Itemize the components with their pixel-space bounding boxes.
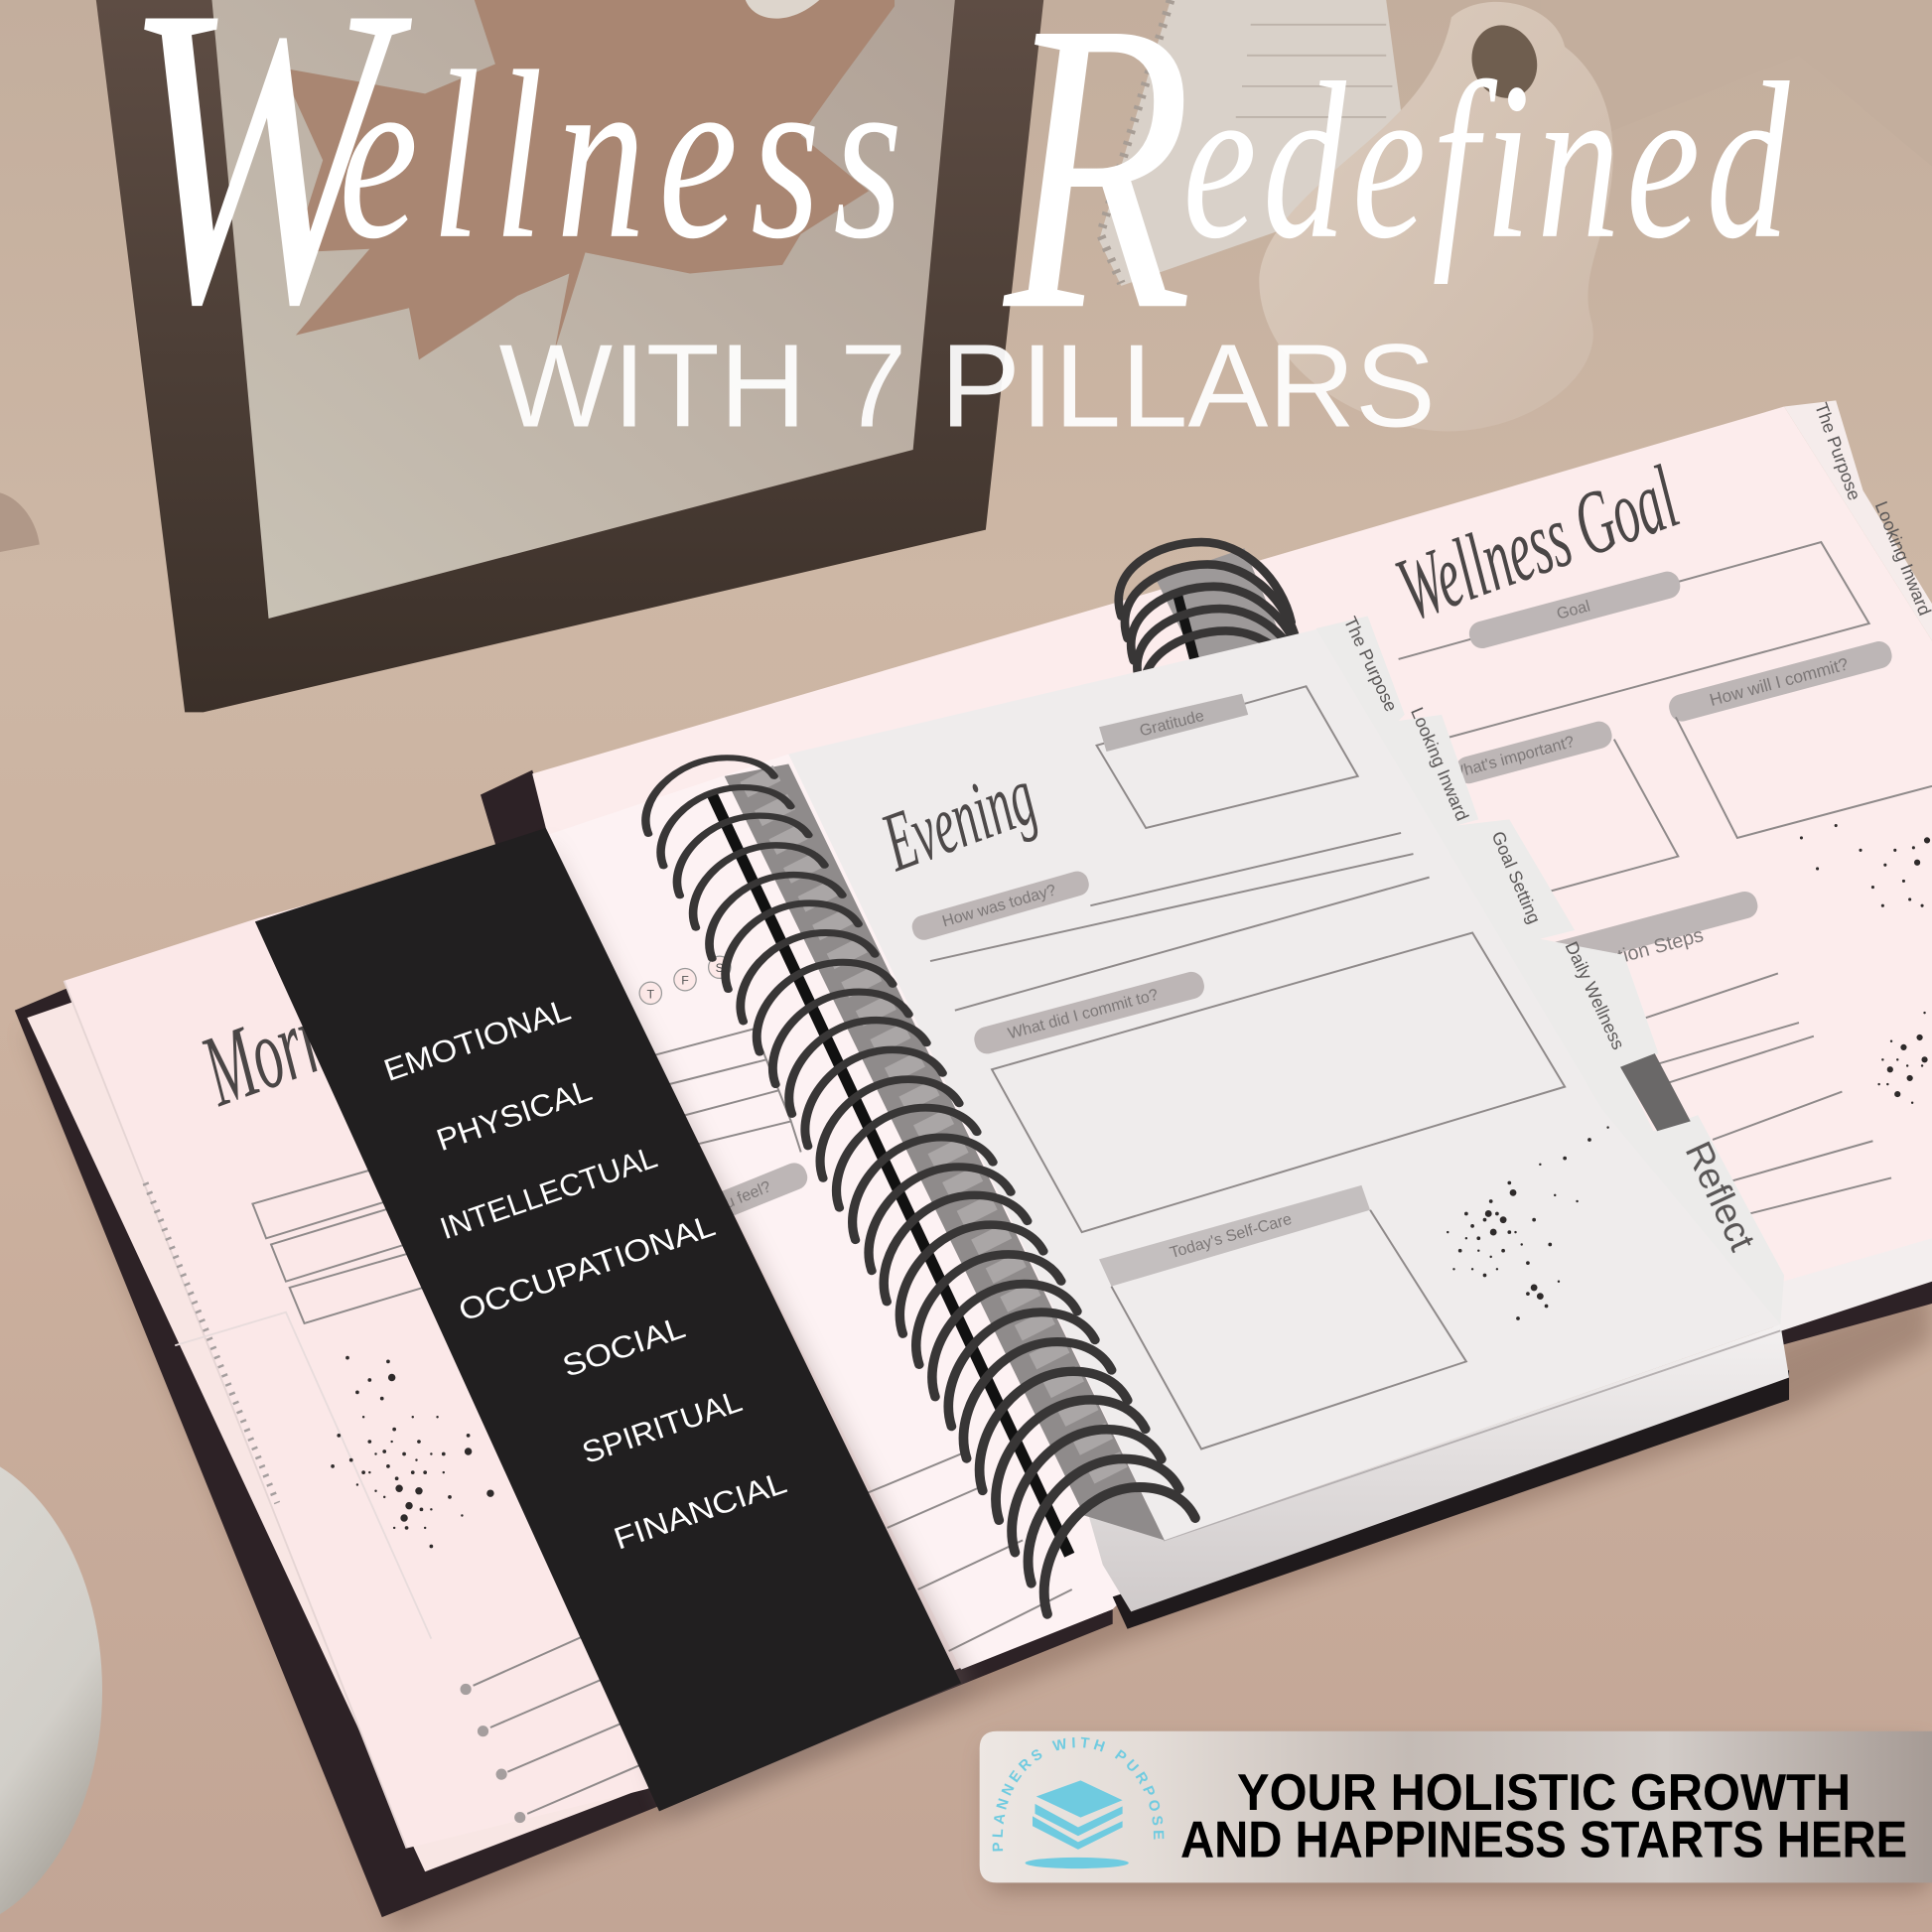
- weekday rows: [647, 1029, 801, 1152]
- important box: [1497, 740, 1678, 905]
- title: Wellness Redefined: ellness: [339, 23, 915, 289]
- bullet lines: [461, 1632, 653, 1823]
- panel: black belly band with 7 pillars: [255, 828, 961, 1811]
- tab label: Daily Wellness: Daily Wellness: [1562, 938, 1628, 1052]
- vase: [1259, 2, 1613, 431]
- tab label: Looking Inward: Looking Inward: [1407, 705, 1472, 824]
- writing lines: [930, 833, 1430, 1011]
- pill: how was today: [909, 869, 1091, 942]
- heading: Evening: Evening: [870, 749, 1046, 889]
- pill: action steps: [1467, 889, 1760, 992]
- tab label: Goal Setting: Goal Setting: [1488, 828, 1545, 926]
- panel: right page: [532, 400, 1932, 1284]
- weekday circles: [639, 956, 731, 1004]
- pill: goal: Goal: [1555, 597, 1592, 623]
- pillar: financial: FINANCIAL: [610, 1465, 791, 1557]
- gray page block and spine: [712, 763, 1165, 1555]
- hard cover left: [15, 832, 1113, 1917]
- goal box: [1399, 542, 1869, 740]
- wall corner right: [1540, 0, 1932, 167]
- weekday circles: F: [681, 974, 689, 988]
- ink splatter right: [1801, 826, 1927, 1103]
- pillar: emotional: EMOTIONAL: [379, 992, 575, 1088]
- black belly band shadow: [546, 838, 973, 1821]
- tab label: Reflect: Reflect: [1678, 1135, 1764, 1258]
- pill: goal: [1466, 569, 1683, 651]
- lower box outline: [175, 1312, 431, 1639]
- tabs of evening page: [1315, 614, 1784, 1324]
- commit box: [1676, 717, 1932, 838]
- pillar: social: SOCIAL: [558, 1310, 689, 1384]
- big box: [992, 932, 1565, 1232]
- pillar: physical: PHYSICAL: [432, 1072, 596, 1158]
- pill: what did I commit to: [971, 969, 1207, 1056]
- panel: left page: [27, 755, 1182, 1871]
- pill: important: What's important?: [1448, 733, 1577, 783]
- pill: how was today: How was today?: [940, 881, 1058, 930]
- gratitude box: Gratitude: [1138, 707, 1206, 740]
- subtitle: with 7 pillars: WITH 7 PILLARS: [499, 320, 1436, 452]
- heading: Wellness Goal: Wellness Goal: [1385, 448, 1691, 640]
- ink splatter evening: [1448, 1128, 1608, 1318]
- weekday circles: T: [646, 987, 654, 1001]
- panel: bottom foil banner: [979, 1731, 1932, 1882]
- tab label: right page: The Purpose: [1811, 400, 1864, 502]
- title: Wellness Redefined: [123, 0, 1796, 396]
- right cover and stack: [1762, 1171, 1932, 1345]
- left page boxes: [252, 1164, 444, 1323]
- spiral rings: [645, 758, 1195, 1614]
- pressed leaf: [281, 0, 895, 359]
- banner shadow: [986, 1743, 1932, 1891]
- pill: commit: How will I commit?: [1708, 653, 1851, 710]
- pill: important: [1448, 719, 1614, 786]
- picture frame: [96, 0, 1043, 712]
- page right of band: [546, 755, 1182, 1670]
- dark tab: [1620, 1053, 1691, 1131]
- banner tagline: YOUR HOLISTIC GROWTH: [1237, 1764, 1851, 1822]
- gratitude box: [1097, 686, 1358, 828]
- pill: action steps: Action Steps: [1593, 924, 1706, 974]
- self-care box: [1099, 1185, 1466, 1449]
- self-care box: Today's Self-Care: [1168, 1210, 1294, 1262]
- right lines: [828, 1453, 1072, 1651]
- book shadow: [25, 1029, 1932, 1928]
- logo: planners with purpose: PLANNERS WITH PURPOSE: [993, 1737, 1164, 1851]
- pill: commit: [1666, 638, 1894, 724]
- ink splatter left: [333, 1358, 490, 1547]
- right page tabs: [1784, 400, 1932, 640]
- small text column: [145, 1182, 277, 1503]
- upper coil rings: [1119, 542, 1315, 711]
- action lines: [1639, 973, 1891, 1213]
- pillar: intellectual: INTELLECTUAL: [436, 1140, 661, 1246]
- shadow shape left: [0, 492, 40, 552]
- cup: [0, 1447, 102, 1932]
- background notebook: [1099, 0, 1411, 286]
- title: Wellness Redefined: edefined: [1182, 38, 1796, 286]
- tab label: right page: [1811, 400, 1932, 619]
- pillar: spiritual: SPIRITUAL: [578, 1383, 747, 1470]
- pill: feel: How do you feel?: [652, 1177, 773, 1241]
- pillar: occupational: OCCUPATIONAL: [454, 1207, 720, 1328]
- heading: Morning: Morning: [188, 953, 413, 1128]
- icon: stacked books: [1033, 1780, 1123, 1850]
- icon: shadow ellipse: [1026, 1858, 1129, 1868]
- evening page stack: [1078, 1324, 1789, 1629]
- weekday circles: S: [716, 961, 724, 975]
- cover top edge: [481, 770, 554, 857]
- pill: feel: [619, 1160, 811, 1258]
- panel: evening page: [788, 628, 1780, 1540]
- tab label: The Purpose: The Purpose: [1340, 614, 1401, 715]
- banner tagline: [1180, 1764, 1907, 1868]
- pill: what did I commit to: What did I commit to?: [1006, 986, 1161, 1042]
